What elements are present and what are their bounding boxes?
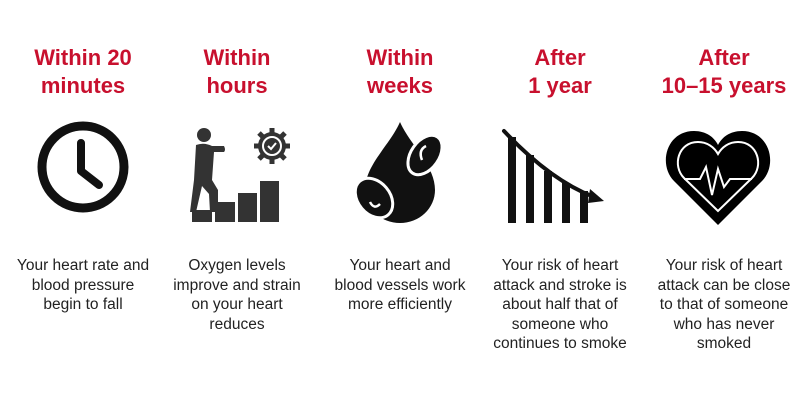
column 3 text: blood vessels work [335, 276, 465, 294]
column 3 title: weeks [367, 73, 433, 98]
icon: blood drop with cells [356, 122, 441, 223]
column 1 text: begin to fall [43, 296, 123, 313]
column 2 title: Within [204, 45, 270, 70]
column 1 text: blood pressure [32, 276, 134, 294]
column 5 text: Your risk of heart [666, 257, 782, 274]
icon: clock [38, 122, 128, 212]
column 5 text: to that of someone [660, 296, 788, 313]
column 2 title [204, 45, 270, 98]
column 2 text: improve and strain [173, 276, 301, 294]
column 3 title [366, 45, 434, 98]
column 1 title: Within 20 [34, 45, 132, 70]
column 1 text: Your heart rate and [17, 257, 149, 274]
column 5 text: attack can be close [658, 276, 790, 294]
column 3 title: Within [366, 45, 434, 70]
icon: declining bar chart with arrow [502, 128, 604, 223]
column 4 title: 1 year [528, 73, 592, 98]
icon: person climbing steps with gear [190, 128, 290, 222]
column 5 text: smoked [697, 335, 751, 352]
column 1 title: minutes [41, 73, 125, 98]
icon: heart with pulse [666, 131, 770, 225]
column 2 text [173, 257, 301, 332]
column 5 title [662, 45, 786, 98]
column 4 title [528, 45, 592, 98]
column 4 text: someone who [512, 316, 608, 332]
column 3 text: Your heart and [349, 257, 451, 274]
column 2 title: hours [206, 73, 268, 98]
column 4 title: After [534, 45, 586, 70]
column 1 title [34, 45, 132, 98]
column 3 text: more efficiently [348, 296, 452, 313]
column 4 text: attack and stroke is [493, 276, 627, 294]
column 5 text [658, 257, 790, 352]
column 4 text: about half that of [502, 296, 618, 313]
column 5 title: After [698, 45, 750, 70]
column 4 text [493, 257, 627, 352]
column 4 text: continues to smoke [493, 335, 627, 352]
column 2 text: on your heart [191, 296, 283, 313]
column 4 text: Your risk of heart [502, 257, 618, 274]
column 1 text [17, 257, 149, 313]
column 5 title: 10–15 years [662, 73, 786, 98]
column 3 text [335, 257, 466, 313]
column 2 text: reduces [209, 316, 265, 332]
column 2 text: Oxygen levels [188, 257, 286, 274]
column 5 text: who has never [674, 316, 774, 332]
